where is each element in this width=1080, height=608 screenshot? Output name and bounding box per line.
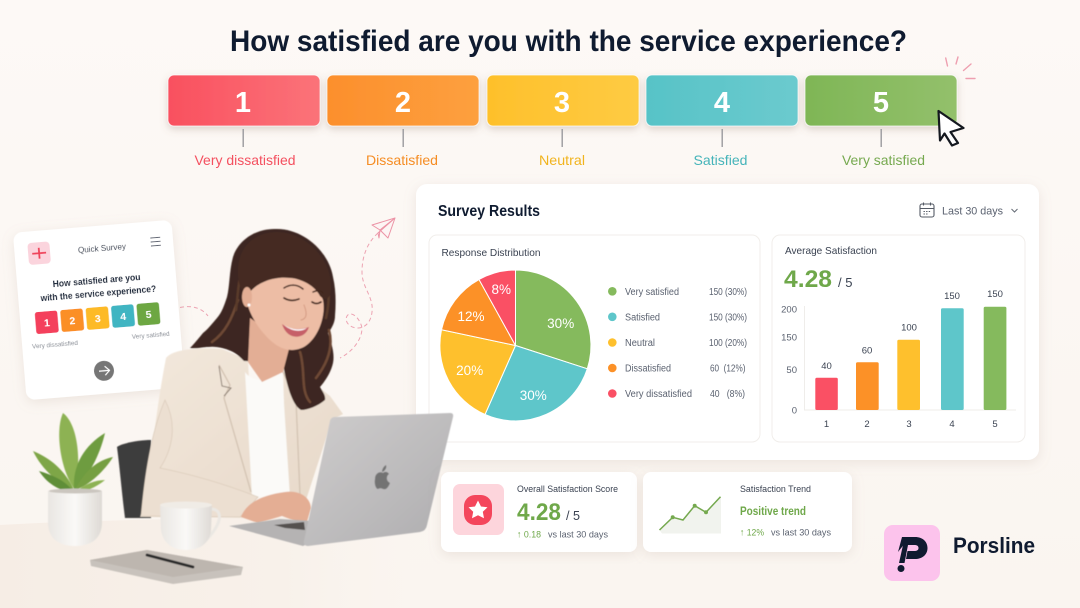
card: overall satisfaction score: Overall Satisfaction Score bbox=[517, 484, 618, 494]
bar chart: 100 bbox=[901, 322, 917, 334]
icon: survey logo bbox=[27, 241, 51, 265]
rating buttons: 4 bbox=[120, 311, 127, 323]
rating buttons: 3 bbox=[94, 313, 101, 325]
bar chart: 200 bbox=[781, 304, 797, 316]
card: satisfaction trend: vs last 30 days bbox=[771, 528, 831, 538]
bar chart: 0 bbox=[792, 406, 797, 416]
scale labels: Very dissatisfied bbox=[32, 340, 79, 351]
rating 2: 2 bbox=[395, 87, 411, 119]
card: overall satisfaction score: 4.28 bbox=[517, 499, 561, 526]
icon: next arrow button bbox=[93, 360, 115, 382]
card: overall satisfaction score bbox=[441, 472, 637, 552]
bar chart bbox=[781, 289, 1016, 430]
rating 5: 5 bbox=[873, 87, 889, 119]
sleeve bbox=[141, 400, 258, 517]
desk table bbox=[0, 513, 470, 608]
shirt bbox=[245, 372, 290, 497]
icon: menu bbox=[150, 237, 161, 246]
card: satisfaction trend: Satisfaction Trend bbox=[740, 484, 811, 494]
legend: Very dissatisfied bbox=[625, 389, 692, 400]
laptop lid bbox=[304, 413, 453, 546]
rating 4 bbox=[646, 75, 798, 168]
laptop base bbox=[229, 519, 330, 546]
card: satisfaction trend bbox=[643, 472, 852, 552]
rating buttons: 2 bbox=[69, 315, 76, 327]
rating 1: 1 bbox=[235, 87, 251, 119]
legend bbox=[608, 287, 747, 400]
bar chart: 40 bbox=[821, 361, 832, 372]
icon: click sparks bbox=[946, 57, 975, 78]
heading: response distribution: Response Distribution bbox=[442, 247, 541, 259]
rating 4: 4 bbox=[714, 87, 730, 119]
heading: average satisfaction: Average Satisfaction bbox=[785, 245, 877, 257]
rating buttons: 1 bbox=[44, 317, 50, 330]
bar chart: 1 bbox=[824, 419, 829, 430]
pie chart: 12% bbox=[457, 309, 485, 324]
rating buttons bbox=[35, 302, 161, 334]
legend: 40 (8%) bbox=[710, 389, 745, 400]
legend: Very satisfied bbox=[625, 287, 679, 298]
rating 2 bbox=[327, 75, 479, 168]
survey question bbox=[38, 271, 157, 304]
icon: brand mark bbox=[884, 525, 940, 581]
survey question: with the service experience? bbox=[39, 284, 157, 304]
dashed flight path with paper plane bbox=[180, 218, 395, 358]
legend: 150 (30%) bbox=[709, 312, 747, 324]
lapels bbox=[219, 365, 300, 495]
pie chart: 20% bbox=[456, 363, 483, 378]
bar chart: 5 bbox=[992, 419, 998, 430]
line chart icon bbox=[660, 497, 721, 534]
rating 4: Satisfied bbox=[694, 152, 748, 168]
score bbox=[784, 266, 852, 293]
notebook and pen bbox=[90, 550, 243, 584]
rating 3: 3 bbox=[554, 87, 570, 119]
scale labels bbox=[32, 331, 171, 351]
legend: 100 (20%) bbox=[709, 338, 747, 349]
icon: calendar bbox=[920, 202, 934, 217]
legend: 150 (30%) bbox=[709, 287, 747, 298]
pen bbox=[147, 555, 193, 567]
panel: average satisfaction bbox=[772, 235, 1025, 442]
card: overall satisfaction score: vs last 30 days bbox=[548, 530, 608, 540]
bar chart: 150 bbox=[781, 332, 797, 344]
bar chart: 60 bbox=[862, 346, 872, 356]
coffee cup bbox=[160, 502, 219, 550]
hair back with waves bbox=[190, 229, 336, 410]
dashboard panel bbox=[416, 184, 1039, 460]
woman working at laptop bbox=[140, 229, 343, 525]
icon: star badge bbox=[453, 484, 504, 535]
notebook bbox=[90, 550, 243, 584]
potted plant bbox=[33, 413, 113, 546]
card: satisfaction trend: Positive trend bbox=[740, 506, 806, 518]
score: / 5 bbox=[838, 275, 852, 290]
pie chart: 30% bbox=[547, 316, 574, 331]
bar chart: 150 bbox=[944, 291, 960, 302]
rating 5 bbox=[805, 75, 957, 168]
pie chart: 8% bbox=[492, 282, 511, 297]
rating 5: Very satisfied bbox=[842, 152, 925, 168]
rating 3: Neutral bbox=[539, 152, 585, 168]
laptop bbox=[229, 413, 453, 546]
legend: Dissatisfied bbox=[625, 364, 671, 375]
legend: 60 (12%) bbox=[710, 364, 746, 375]
icon: laptop logo bbox=[375, 465, 390, 489]
panel: response distribution bbox=[429, 235, 760, 442]
heading: survey results: Survey Results bbox=[438, 203, 540, 220]
pie chart: 30% bbox=[520, 388, 547, 403]
rating 1: Very dissatisfied bbox=[194, 152, 296, 168]
face bbox=[248, 278, 324, 350]
ear bbox=[242, 287, 252, 307]
rating 3 bbox=[487, 75, 639, 168]
card heading: Quick Survey bbox=[78, 241, 127, 255]
eyes, nose and smile bbox=[284, 285, 323, 320]
bar chart: 4 bbox=[949, 419, 955, 430]
hair front bbox=[238, 232, 331, 299]
bar chart: 3 bbox=[906, 419, 912, 430]
bar chart: 2 bbox=[864, 419, 870, 430]
hand bbox=[241, 492, 311, 525]
brand logo bbox=[884, 525, 1035, 581]
office chair bbox=[117, 440, 151, 518]
jacket bbox=[140, 348, 343, 518]
survey question: How satisfied are you bbox=[52, 272, 141, 290]
brand name: Porsline bbox=[953, 533, 1035, 558]
title: How satisfied are you with the service experience? bbox=[230, 25, 907, 58]
bar chart: 150 bbox=[987, 289, 1003, 300]
score: 4.28 bbox=[784, 266, 832, 293]
scale labels: Very satisfied bbox=[132, 331, 170, 341]
legend: Satisfied bbox=[625, 312, 660, 324]
rating 1 bbox=[168, 75, 320, 168]
neck bbox=[248, 318, 290, 382]
date range selector bbox=[920, 202, 1018, 218]
pot bbox=[48, 489, 102, 546]
icon: chevron bbox=[1012, 209, 1018, 212]
panel: quick survey card bbox=[13, 220, 185, 400]
date range selector: Last 30 days bbox=[942, 206, 1003, 218]
card: overall satisfaction score: ↑ 0.18 bbox=[517, 530, 541, 540]
rating 2: Dissatisfied bbox=[366, 152, 438, 168]
icon: paper plane bbox=[372, 218, 395, 238]
card: satisfaction trend: ↑ 12% bbox=[740, 528, 764, 538]
pie chart bbox=[440, 270, 591, 421]
bar chart: 50 bbox=[786, 365, 797, 376]
icon: mouse cursor bbox=[938, 111, 964, 146]
legend: Neutral bbox=[625, 338, 655, 349]
card: overall satisfaction score: / 5 bbox=[566, 509, 580, 523]
rating scale bbox=[168, 75, 957, 168]
rating buttons: 5 bbox=[145, 309, 152, 321]
leaves bbox=[33, 413, 113, 492]
